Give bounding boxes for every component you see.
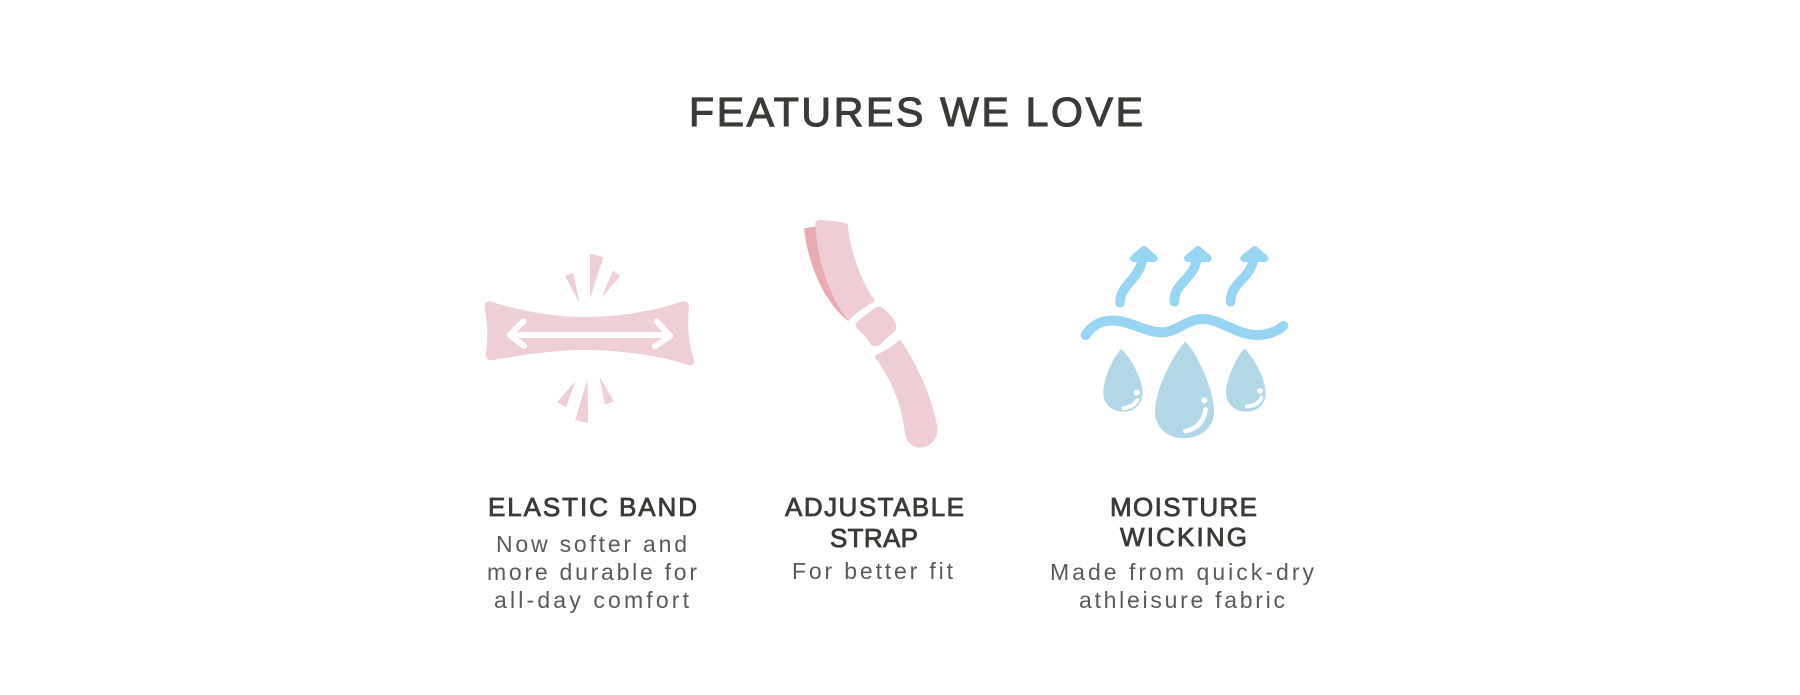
panel: elastic band (485, 254, 697, 613)
description: moisture wicking: Made from quick-dry (1050, 559, 1314, 585)
panel: moisture wicking (1050, 250, 1314, 613)
heading: moisture wicking (1110, 492, 1257, 552)
heading: adjustable strap: STRAP (830, 523, 918, 553)
strap buckle (856, 307, 896, 346)
stretch arrow (510, 321, 670, 346)
icon: stretched elastic band (485, 254, 694, 423)
description: adjustable strap: For better fit (792, 558, 954, 584)
rising arrows (1120, 250, 1265, 303)
strap lower section (874, 339, 938, 448)
heading: moisture wicking: MOISTURE (1110, 492, 1257, 522)
heading: adjustable strap (785, 492, 964, 553)
band shape (485, 301, 694, 365)
panel: adjustable strap (785, 220, 964, 584)
description: moisture wicking: athleisure fabric (1079, 587, 1285, 613)
heading: elastic band: ELASTIC BAND (488, 492, 697, 522)
heading: moisture wicking: WICKING (1120, 522, 1247, 552)
icon: moisture wicking (1086, 250, 1283, 438)
description: moisture wicking (1050, 559, 1314, 613)
strap back layer (804, 226, 849, 322)
water drops (1103, 342, 1266, 438)
tension spikes (557, 254, 620, 423)
description: elastic band: Now softer and (496, 531, 687, 557)
strap upper section (815, 220, 875, 321)
description: elastic band: more durable for (487, 559, 697, 585)
title: FEATURES WE LOVE (689, 89, 1143, 135)
description: elastic band (487, 531, 697, 613)
fabric wave (1086, 319, 1283, 335)
icon: strap (804, 220, 938, 448)
drop highlights (1123, 388, 1263, 431)
heading: adjustable strap: ADJUSTABLE (785, 492, 964, 522)
description: elastic band: all-day comfort (494, 587, 690, 613)
